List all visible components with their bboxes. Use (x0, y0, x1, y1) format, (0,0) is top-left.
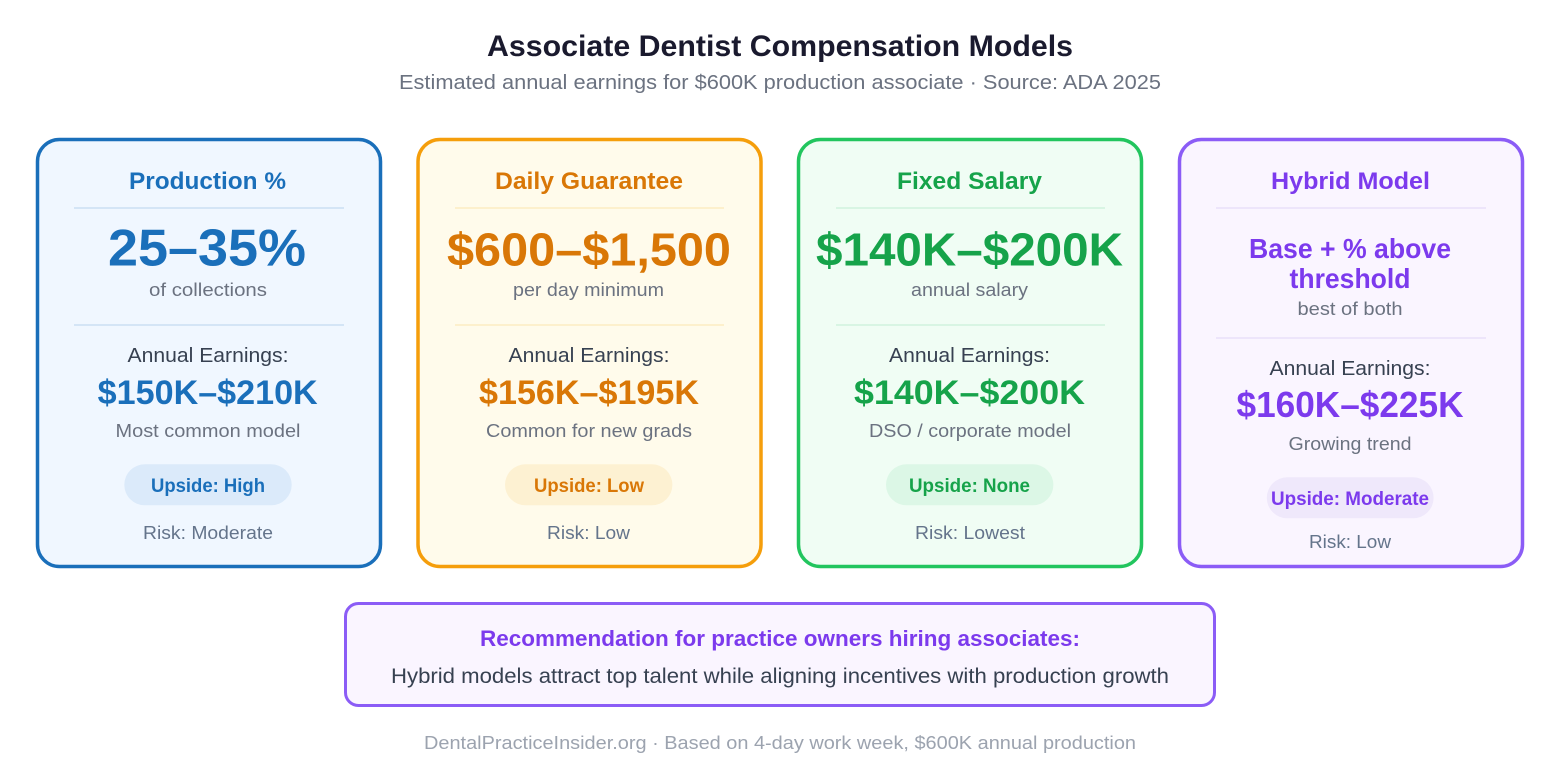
risk label: Risk: Low (547, 523, 631, 543)
upside pill (1267, 477, 1434, 518)
rate caption: best of both (1298, 299, 1402, 319)
upside pill (124, 464, 292, 505)
upside pill: Upside: Low (534, 476, 644, 497)
card background (418, 140, 761, 566)
rate value: threshold (1290, 263, 1410, 294)
risk label: Risk: Lowest (915, 523, 1025, 543)
risk label: Risk: Low (1309, 532, 1392, 552)
rate caption: annual salary (911, 280, 1028, 300)
card background (38, 140, 380, 566)
annual earnings value: $150K–$210K (98, 374, 318, 412)
card heading: Production % (129, 168, 286, 195)
upside pill: Upside: None (909, 476, 1030, 497)
annual earnings label: Annual Earnings: (889, 345, 1050, 367)
panel: fixed salary (798, 140, 1142, 566)
risk label: Risk: Moderate (143, 523, 273, 543)
rate caption: per day minimum (513, 280, 664, 300)
upside pill (886, 464, 1053, 505)
card heading: Fixed Salary (897, 168, 1043, 195)
footer note: DentalPracticeInsider.org · Based on 4-day work week, $600K annual production (424, 733, 1136, 753)
rate caption: of collections (149, 280, 267, 300)
upside pill: Upside: Moderate (1271, 489, 1429, 510)
callout box (346, 604, 1214, 706)
rate value (1249, 233, 1451, 294)
panel: daily guarantee (418, 140, 761, 566)
card background (798, 140, 1142, 566)
annual earnings value: $160K–$225K (1236, 384, 1464, 425)
rate value: $600–$1,500 (447, 224, 731, 276)
annual earnings label: Annual Earnings: (128, 345, 288, 367)
card background (1180, 140, 1522, 566)
card heading: Daily Guarantee (495, 168, 683, 195)
title: Associate Dentist Compensation Models (487, 30, 1073, 63)
panel: hybrid model (1180, 140, 1522, 566)
model note: Most common model (116, 421, 300, 441)
callout: recommendation (346, 604, 1214, 706)
model note: Growing trend (1288, 434, 1412, 454)
annual earnings value: $140K–$200K (854, 374, 1085, 412)
upside pill (505, 464, 672, 505)
rate value: $140K–$200K (816, 224, 1123, 276)
model note: Common for new grads (486, 421, 692, 441)
card heading: Hybrid Model (1271, 168, 1430, 195)
upside pill: Upside: High (151, 476, 265, 497)
callout heading: Recommendation for practice owners hiring associates: (480, 626, 1080, 651)
annual earnings label: Annual Earnings: (508, 345, 670, 367)
rate value: 25–35% (108, 220, 306, 278)
callout body: Hybrid models attract top talent while aligning incentives with production growth (391, 665, 1169, 688)
subtitle: Estimated annual earnings for $600K production associate · Source: ADA 2025 (399, 72, 1161, 94)
rate value: Base + % above (1249, 233, 1451, 264)
annual earnings label: Annual Earnings: (1270, 358, 1430, 380)
annual earnings value: $156K–$195K (479, 374, 699, 412)
panel: production percent (38, 140, 380, 566)
model note: DSO / corporate model (869, 421, 1071, 441)
